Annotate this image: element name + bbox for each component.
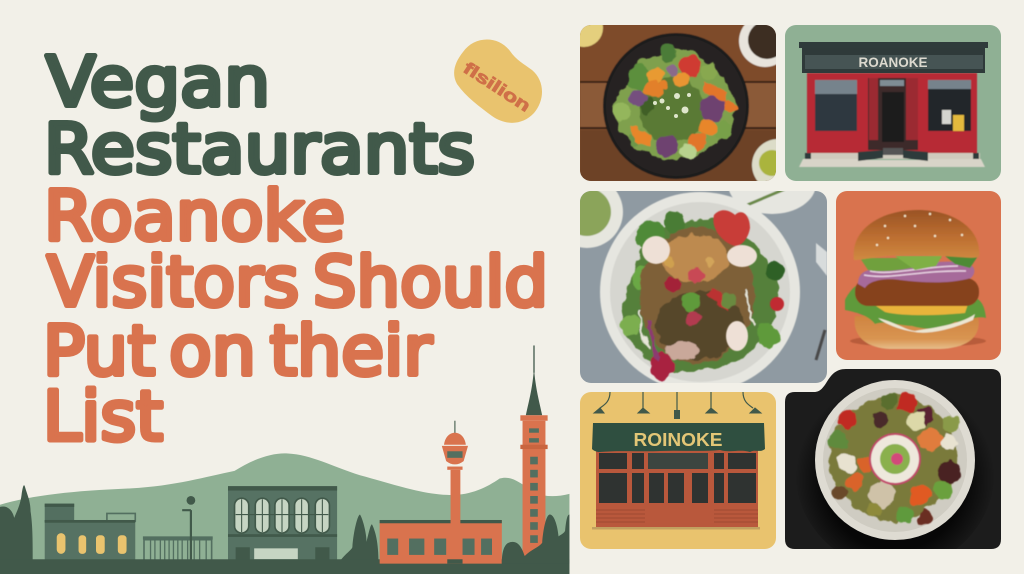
library building <box>45 504 135 560</box>
heading: Vegan Restaurants: Vegan <box>46 42 270 122</box>
radish slices <box>642 236 670 264</box>
patty <box>855 278 979 306</box>
cheese <box>873 304 968 315</box>
tile: illustrated yellow restaurant <box>580 392 776 549</box>
ground <box>0 559 569 574</box>
lower lettuce and sauce <box>845 285 986 329</box>
heading: Roanoke Visitors Should Put on their List: Put on their <box>43 312 433 392</box>
badge: yellow blob <box>454 39 542 123</box>
avocado <box>860 258 942 271</box>
heading: Vegan Restaurants: Restaurants <box>44 110 475 190</box>
photo tile: salad plate on black <box>785 369 1001 549</box>
photo tile: grain salad in white bowl <box>580 191 827 383</box>
awning sign text: ROINOKE <box>634 430 722 450</box>
pavilion and lamp <box>143 496 213 561</box>
plate <box>807 438 983 549</box>
heading: Roanoke Visitors Should Put on their List <box>43 176 548 457</box>
tile: veggie burger on terracotta <box>836 191 1001 360</box>
sign text: ROANOKE <box>858 54 928 70</box>
heading: Roanoke Visitors Should Put on their List: Roanoke <box>44 176 345 256</box>
awning <box>592 423 765 452</box>
side dishes <box>738 25 776 68</box>
facade <box>596 450 758 527</box>
bowl <box>600 192 800 392</box>
heading: Roanoke Visitors Should Put on their List: List <box>43 377 163 457</box>
orange civic building <box>380 520 502 564</box>
grain <box>639 227 755 363</box>
strawberry <box>713 210 750 246</box>
tile: red storefront on green <box>785 25 1001 181</box>
side plates <box>580 191 624 248</box>
tomato <box>770 297 784 311</box>
arched hall <box>228 486 337 563</box>
bottom bun <box>855 316 979 349</box>
lemon <box>580 25 604 48</box>
clock tower <box>520 345 548 556</box>
trees middle <box>341 514 378 560</box>
pesto flecks <box>653 93 691 118</box>
greens <box>621 220 780 372</box>
badge lettering: flsilion <box>460 58 534 116</box>
salad <box>613 43 736 160</box>
onion <box>858 262 974 288</box>
trees left <box>0 485 33 564</box>
hanging lamps <box>594 392 761 419</box>
top bun <box>854 210 979 260</box>
bowl <box>603 33 749 179</box>
heading: Vegan Restaurants <box>44 42 475 190</box>
photo tile: salad in black bowl on wood <box>580 25 776 181</box>
water tower <box>442 421 468 564</box>
skyline illustration <box>0 345 569 574</box>
heading: Roanoke Visitors Should Put on their List: Visitors Should <box>47 242 548 322</box>
trees right <box>502 515 569 564</box>
hills <box>0 453 569 573</box>
title <box>43 42 548 457</box>
salad ring <box>829 396 958 522</box>
center radish bowl <box>869 433 921 485</box>
